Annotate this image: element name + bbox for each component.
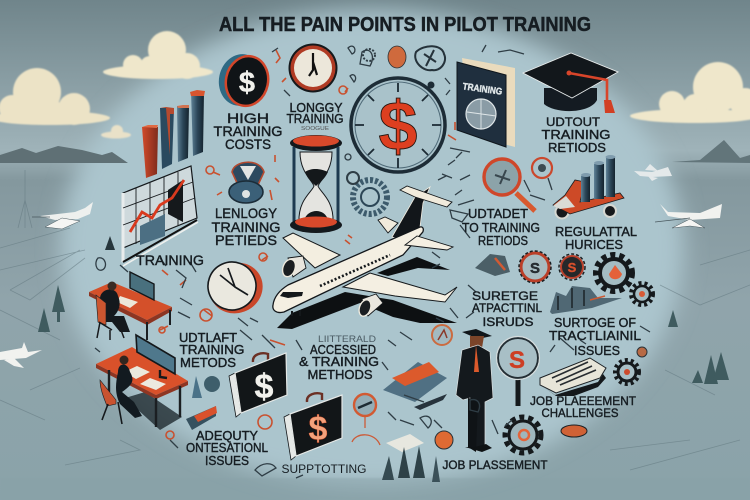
icon: gear lower right [615,360,639,384]
icon: magnifier with dollar: S [509,347,525,374]
icon: gear top right large [596,255,632,291]
label: adequty ontesationl issues: ADEQUTY [196,429,259,443]
label: high training costs: HIGH [227,111,269,126]
label: suretge atpacttinl isruds: ISRUDS [482,315,534,329]
label: surtoge of tractliainil issues [549,316,641,358]
label: training: TRAINING [136,253,204,268]
label: job placement: JOB PLASSEMENT [442,458,548,472]
icon: dollar badge gear one [519,251,551,283]
cloud: far left [0,68,110,125]
label: longgy training [286,101,344,132]
label: longgy training: SOOGUE [301,126,330,132]
mountains: right [672,140,750,163]
icon: books and trees [382,434,440,482]
label: udtlaft training methods: TRAINING [180,343,244,357]
icon: dark machine blob top [415,46,445,70]
label: job placement challenges: CHALLENGES [542,406,618,420]
label: longgy training: TRAINING [286,112,344,126]
small scattered doodles [95,45,650,478]
icon: coin with dollar [214,50,273,110]
icon: dollar briefcase right: $ [309,410,328,448]
label: accessied training methods: ACCESSIED [310,343,376,357]
chart: line graph board [123,166,198,266]
plane cockpit and windows [280,255,390,298]
title: ALL THE PAIN POINTS IN PILOT TRAINING [219,14,591,36]
label: udtadet to training retiods: RETIODS [478,234,528,248]
plane shadow [277,292,457,329]
icon: large stopwatch with dollar: $ [379,87,417,165]
label: lenlogy training periods: PETIEDS [215,233,277,248]
ground fields lines [0,170,750,470]
label: udtadet to training retiods [462,207,540,248]
icon: training book [457,58,515,147]
label: suretge atpacttinl isruds: ATPACTTINL [472,301,542,315]
label: supptotting: SUPPTOTTING [282,464,367,476]
icon: dollar badge gear one: S [530,260,540,277]
icon: wall clock [288,44,338,92]
icon: magnifying glass upper right [484,159,535,211]
label: lenlogy training periods [212,206,280,248]
label: regulatal hurices [555,225,637,252]
label: regulatal hurices: HURICES [565,238,623,252]
label: job placement challenges [530,394,637,420]
cloud: small left [101,125,131,138]
icon: no-entry sign [352,394,380,445]
icon: small plane far left [32,202,93,229]
label: high training costs [214,111,282,152]
icon: person at desk top [89,272,172,340]
label: accessied training methods [299,343,379,382]
label: regulatal hurices: REGULATTAL [555,225,637,239]
label: longgy training: LONGGY [290,101,343,115]
plane right wing [343,273,457,302]
label: lenlogy training periods: TRAINING [212,220,280,235]
icon: dollar badge gear two [559,254,585,280]
icon: coin with dollar: $ [239,67,255,99]
icon: magnifier with dollar [496,336,540,406]
plane right stabilizer [405,236,453,250]
label: accessied training methods: METHODS [308,368,372,382]
label: udtlaft training methods [179,331,244,370]
icon: small plane right upper [634,164,672,181]
plane fuselage [273,227,423,313]
icon: machinery cluster centre [475,254,510,276]
icon: machinery cluster right [550,286,622,314]
icon: tilted clock [200,254,271,322]
label: high training costs: COSTS [225,137,271,152]
icon: orange gauges [432,325,647,437]
label: surtoge of tractliainil issues: TRACTLIAINIL [549,329,641,343]
label: lenlogy training periods: LENLOGY [215,206,277,221]
icon: gear right small [631,283,653,305]
icon: large stopwatch with dollar [351,78,445,172]
cloud: upper left centre [103,31,213,79]
label: udtadet to training retiods: UDTADET [468,207,528,221]
label: adequty ontesationl issues: ISSUES [205,454,249,468]
label: suretge atpacttinl isruds: SURETGE [472,289,538,303]
icon: small plane right [655,204,722,228]
icon: blue gear behind plane [353,180,387,214]
icon: dollar briefcase left [229,353,287,417]
icon: dollar briefcase right [284,393,342,460]
icon: scooter with cylinders [553,155,624,218]
icon: pilot in suit [456,329,493,452]
plane landing gear [292,310,300,316]
label: udtout training retiods: TRAINING [542,128,610,142]
icon: rising bar chart [142,90,205,178]
plane right engine [357,294,383,318]
cloud: right [630,62,750,123]
label: accessied training methods: & TRAINING [299,355,379,369]
icon: small device gauge [229,162,264,203]
icon: orange coin [435,431,453,449]
icon: dollar badge gear two: S [568,260,577,275]
icon: hourglass [290,135,342,233]
label: job placement challenges: JOB PLAEEEMENT [530,394,637,408]
plane rear stabilizer [378,217,398,233]
label: high training costs: TRAINING [214,124,282,139]
label: adequty ontesationl issues [186,429,268,468]
mountains: left [0,146,128,163]
icon: tablet device [540,358,606,396]
label: udtadet to training retiods: TO TRAINING [462,221,540,235]
label: surtoge of tractliainil issues: ISSUES [574,344,620,358]
icon: dollar briefcase left: $ [255,368,274,406]
main airplane [273,186,457,329]
icon: training book: TRAINING [462,81,503,98]
icon: red box [186,406,217,430]
label: surtoge of tractliainil issues: SURTOGE OF [554,316,636,330]
icon: graduation cap [523,53,618,113]
label: udtlaft training methods: UDTLAFT [179,331,237,345]
icon: person at desk bottom [96,335,220,430]
scribbled caption above methods label: LIITTERALD [318,334,377,344]
plane left engine [280,256,306,279]
icon: trees [38,236,729,384]
plane tail fin [392,187,430,240]
icon: small plane lower left [0,342,42,368]
label: udtout training retiods: RETIODS [548,141,606,155]
icon: orange egg badge [388,46,406,68]
label: suretge atpacttinl isruds [472,289,542,329]
plane top stabilizer [400,186,452,207]
icon: orange folder papers [383,362,447,410]
icon: red ring target [532,158,552,178]
icon: gear bottom centre [505,417,541,453]
label: udtlaft training methods: METODS [180,356,236,370]
plane left wing [283,233,340,268]
label: adequty ontesationl issues: ONTESATIONL [186,441,268,455]
label: udtout training retiods [542,115,610,155]
label: udtout training retiods: UDTOUT [546,115,601,129]
